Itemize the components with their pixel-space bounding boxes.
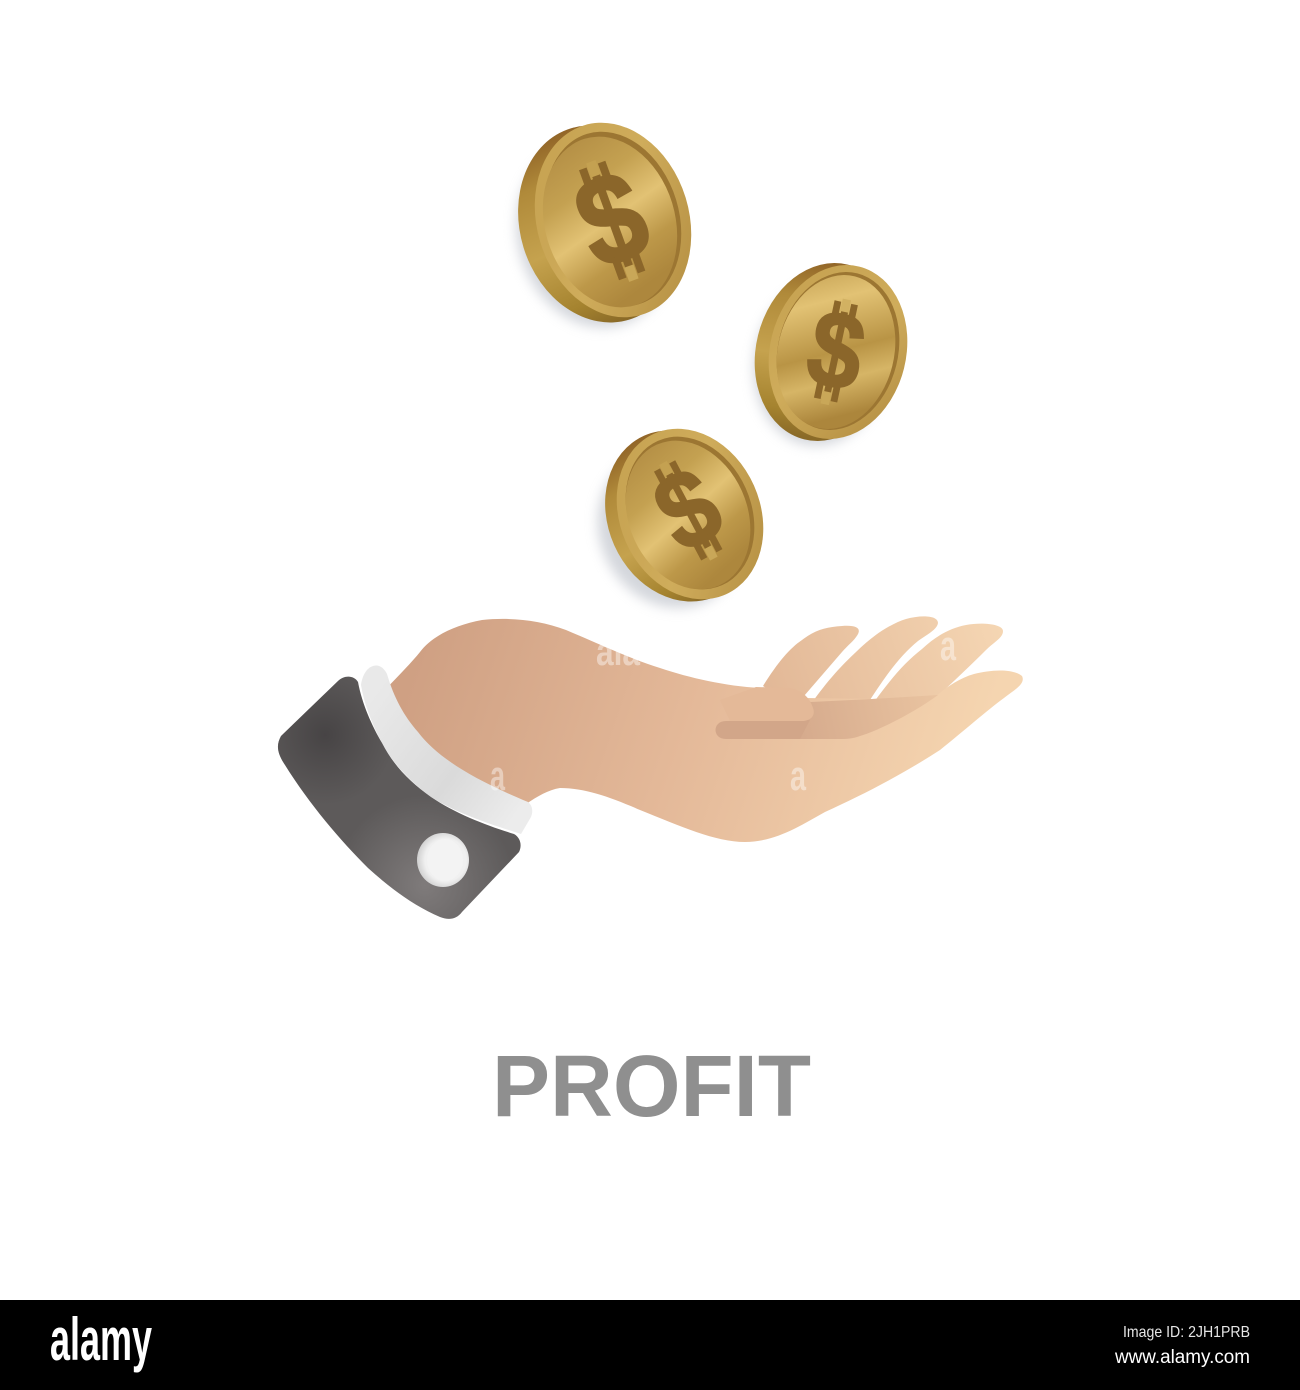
title: PROFIT [492,1038,811,1135]
icon: jacket cuff [278,677,521,919]
watermark letters [490,622,956,799]
watermark letters: ala [596,630,641,674]
cuff button [417,833,469,887]
footer bar [0,1300,1300,1390]
image id: Image ID: 2JH1PRB [1123,1324,1250,1341]
icon: hand [380,616,1023,842]
website: www.alamy.com [1114,1347,1250,1368]
dollar sign: $ [797,285,875,415]
coin: bottom [571,405,790,633]
thumb [720,687,814,721]
finger 1 [763,626,859,704]
dollar sign: $ [558,141,666,297]
finger 2 [811,616,938,712]
coin: top left [493,103,715,348]
coin: right [736,248,925,456]
watermark letters: a [490,752,505,799]
palm crease [784,695,938,739]
thumb shadow [716,720,810,739]
dollar sign: $ [635,442,740,576]
finger 3 [874,624,1003,712]
logo: alamy [50,1306,152,1373]
palm and wrist [380,619,1023,842]
icon: shirt collar [361,665,532,834]
watermark letters: a [790,752,806,799]
watermark letters: a [940,622,956,669]
